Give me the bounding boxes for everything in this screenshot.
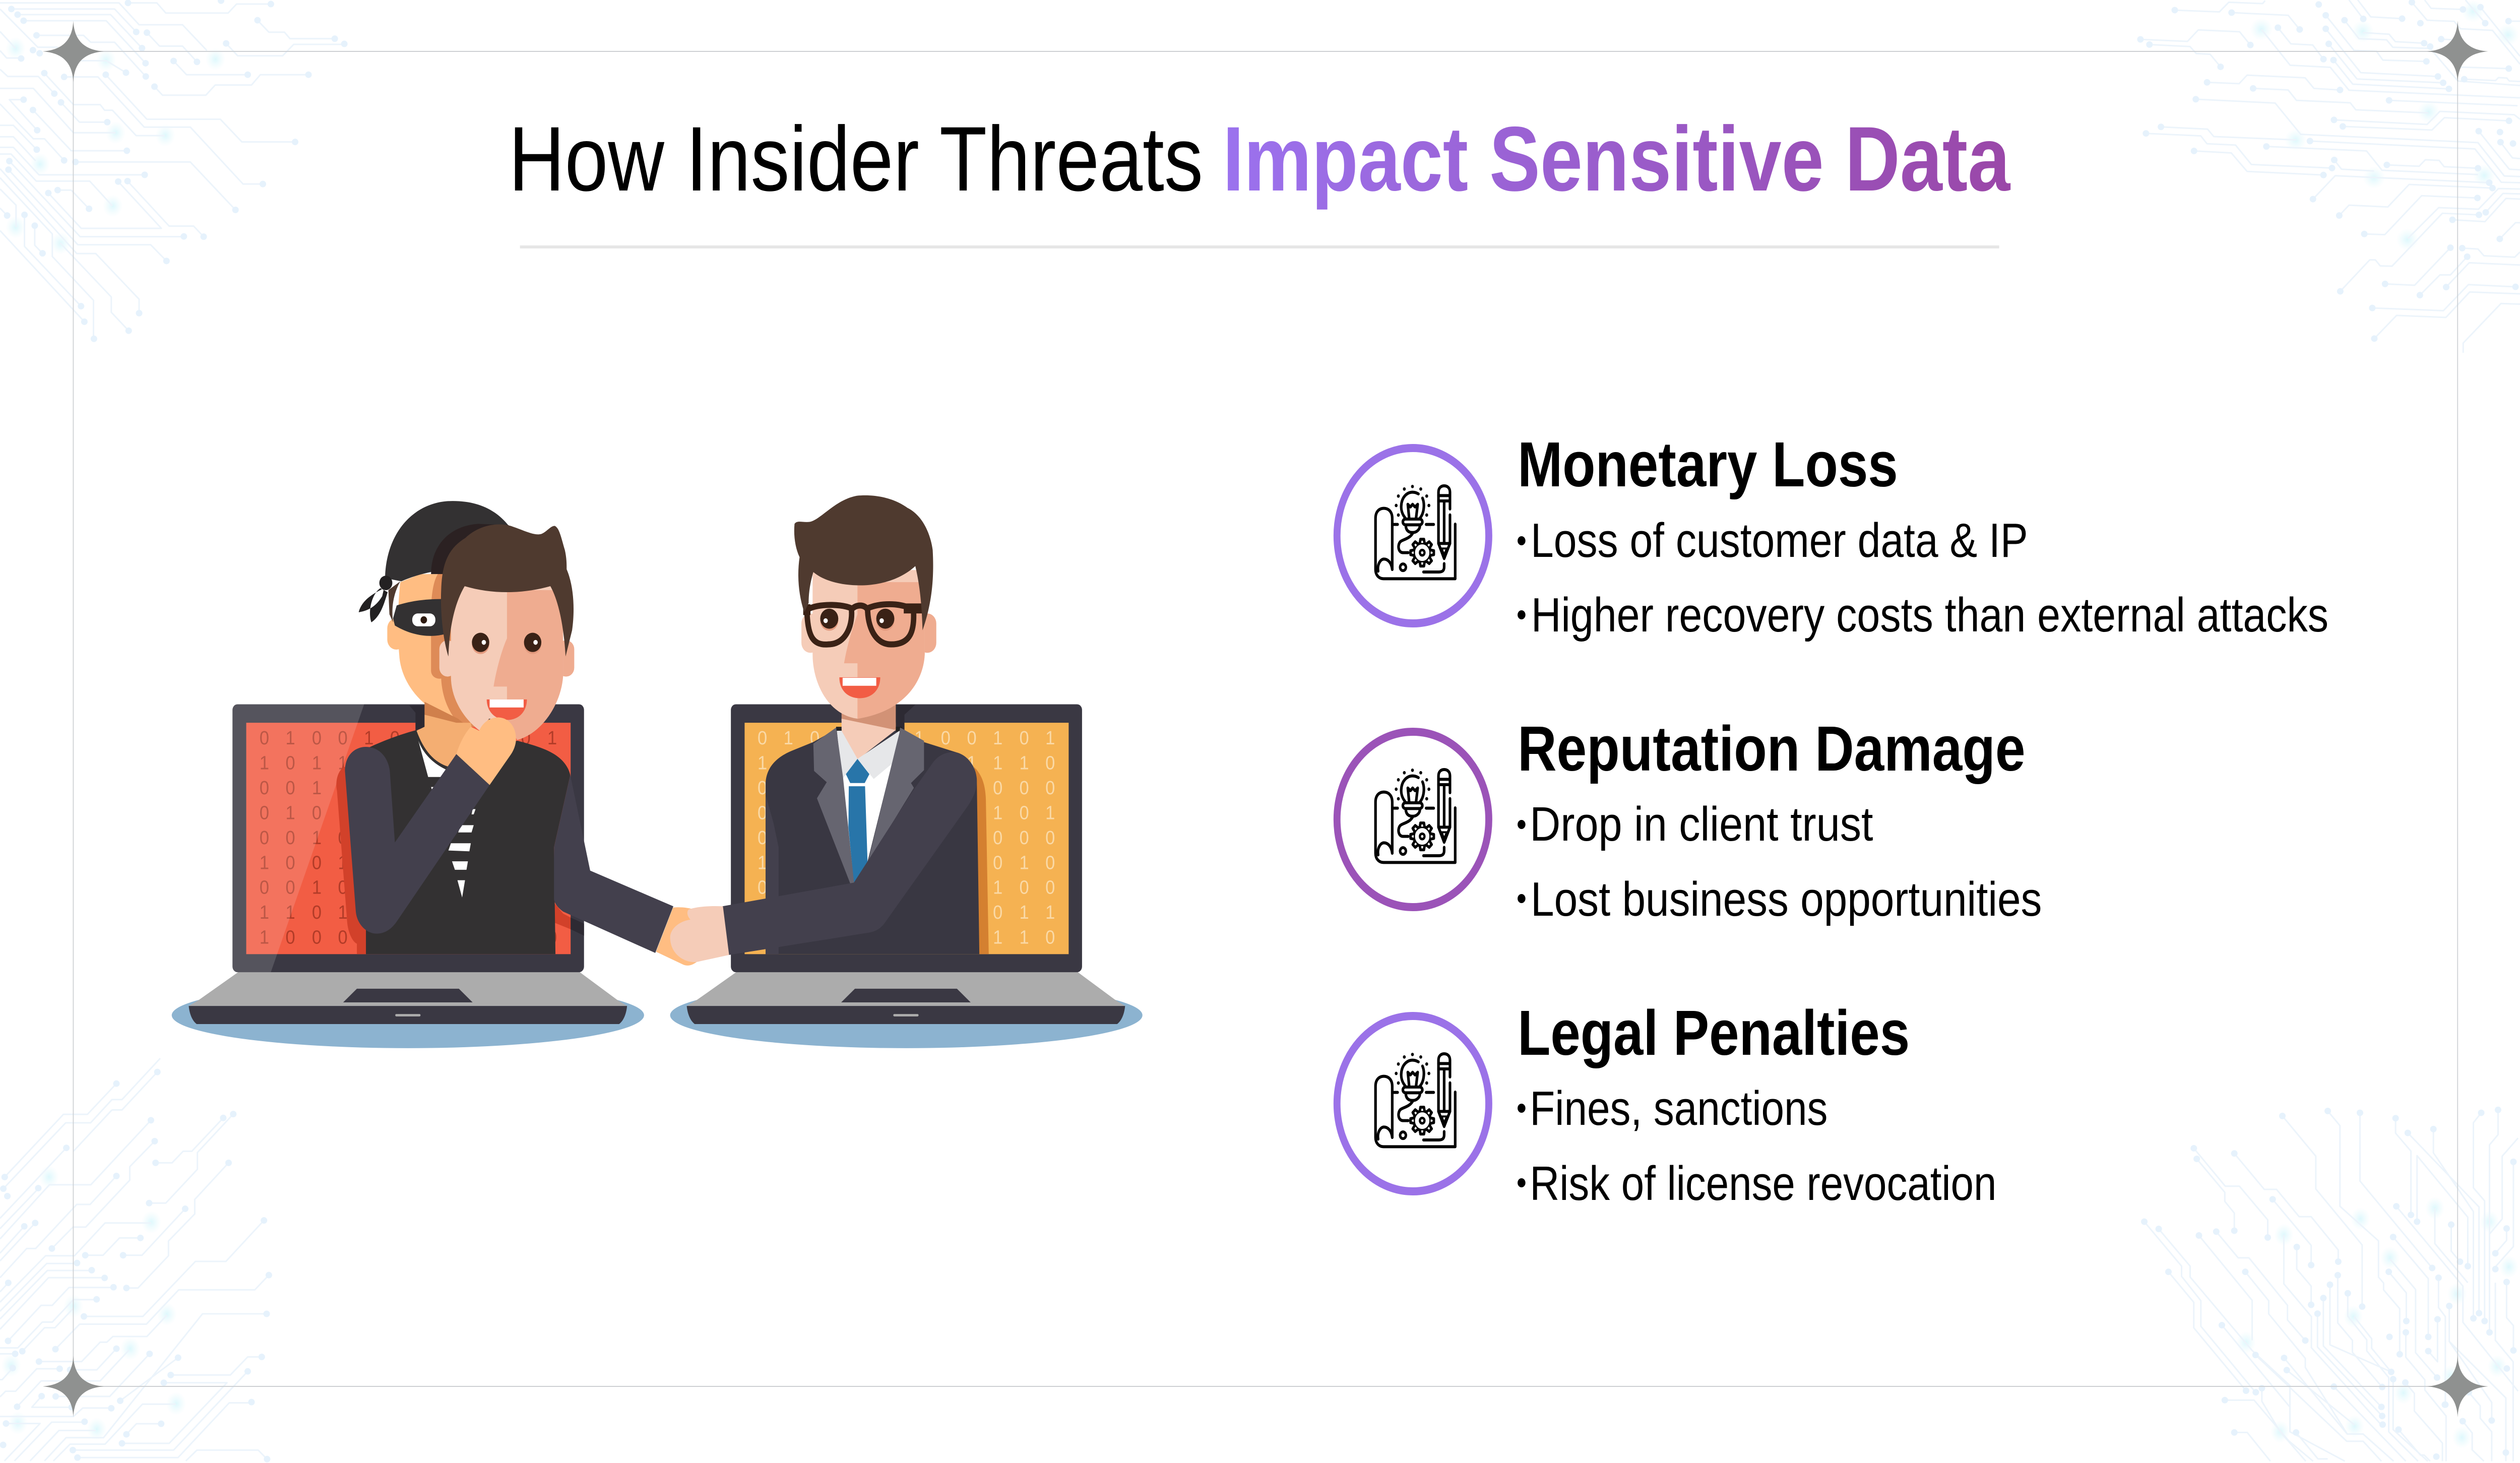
illustration: insider laptop screen: 1101 xyxy=(260,901,348,923)
illustration: insider with mask xyxy=(336,501,673,954)
bullet list: reputation damage: Lost business opportunities xyxy=(1531,872,2042,926)
illustration: colleague laptop screen: 1010 xyxy=(758,852,1055,873)
heading: reputation damage: Reputation Damage xyxy=(1518,713,2026,784)
title: Impact Sensitive Data xyxy=(1223,108,2010,211)
background: top-left circuit pattern xyxy=(0,1,344,339)
illustration: colleague laptop screen: 110 xyxy=(993,926,1055,948)
illustration: insider laptop screen: 0101 xyxy=(260,802,348,823)
heading: legal penalties: Legal Penalties xyxy=(1518,997,1910,1068)
illustration: colleague laptop screen: 0100 xyxy=(758,876,1055,898)
icon: idea blueprint in purple ring xyxy=(1337,1016,1489,1191)
heading: monetary loss: Monetary Loss xyxy=(1518,429,1898,500)
icon: idea blueprint in violet ring xyxy=(1337,732,1489,907)
bullet list: monetary loss xyxy=(1518,514,2328,642)
illustration: insider laptop screen: 0010 xyxy=(260,876,348,898)
panel: reputation damage xyxy=(1337,713,2042,926)
illustration: colleague with glasses xyxy=(722,495,989,955)
illustration: colleague laptop screen: 0101 xyxy=(758,802,1055,823)
panel: monetary loss xyxy=(1337,429,2328,642)
illustration: colleague laptop screen: 010100101 xyxy=(758,727,1055,749)
illustration: colleague laptop screen: 011 xyxy=(993,901,1055,923)
illustration: colleague laptop screen: 0000 xyxy=(758,777,1055,798)
background: top-right circuit pattern xyxy=(2140,0,2520,353)
illustration: insider laptop screen: 10000 xyxy=(260,926,557,948)
bullet list: reputation damage: Drop in client trust xyxy=(1530,797,1873,851)
illustration: insider laptop screen xyxy=(172,704,644,1048)
bullet list: legal penalties: Fines, sanctions xyxy=(1530,1082,1828,1135)
illustration: insider laptop screen: 0010 xyxy=(260,777,348,798)
panel: legal penalties xyxy=(1337,997,1996,1211)
illustration: insider laptop screen: 01001001 xyxy=(260,727,557,749)
icon: idea blueprint in purple ring xyxy=(1337,448,1489,623)
illustration: insider laptop screen: 0010 xyxy=(260,826,348,848)
illustration: insider laptop screen: 1011 xyxy=(260,752,348,774)
bullet list: monetary loss: Loss of customer data & IP xyxy=(1531,514,2028,567)
illustration: colleague laptop screen: 11110 xyxy=(758,752,1055,774)
title xyxy=(509,108,2010,211)
bullet list: legal penalties xyxy=(1518,1082,1996,1211)
bullet list: reputation damage xyxy=(1518,797,2042,926)
bullet list: monetary loss: Higher recovery costs than external attacks xyxy=(1531,588,2328,642)
illustration: colleague laptop screen: 0000 xyxy=(758,826,1055,848)
illustration: colleague laptop screen xyxy=(670,704,1143,1048)
bullet list: legal penalties: Risk of license revocation xyxy=(1530,1157,1996,1211)
background: bottom-right circuit pattern xyxy=(2145,1110,2518,1461)
background: bottom-left circuit pattern xyxy=(0,1058,269,1461)
title: How Insider Threats xyxy=(509,108,1203,211)
illustration: insider laptop screen: 1001 xyxy=(260,852,348,873)
illustration: handshake xyxy=(656,906,729,966)
